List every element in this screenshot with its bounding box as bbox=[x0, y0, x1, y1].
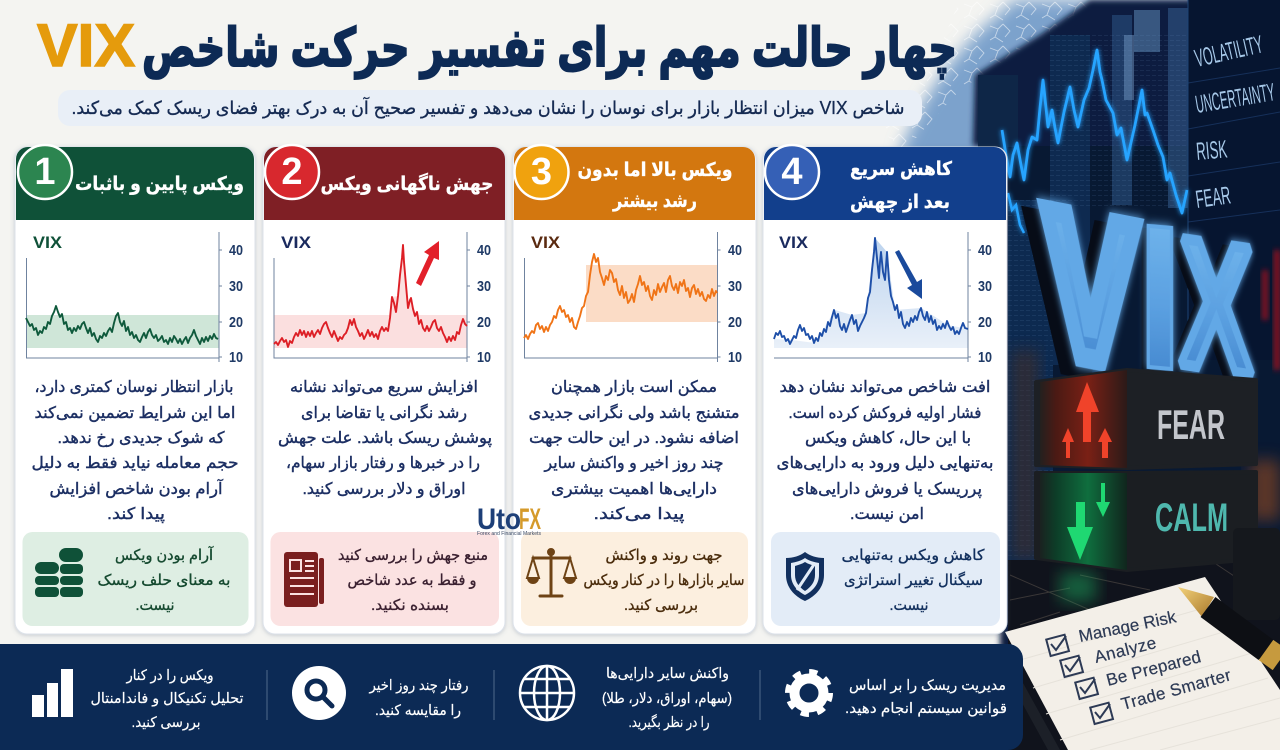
card 4 description: به‌تنهایی دلیل ورود به دارایی‌های bbox=[776, 455, 994, 473]
card 1 number badge bbox=[18, 145, 72, 199]
card 3 callout: بررسی کنید. bbox=[624, 597, 698, 614]
label: FEAR: FEAR bbox=[1157, 401, 1225, 448]
card 2 callout: و فقط به عدد شاخص bbox=[348, 572, 476, 589]
card 2 callout: بسنده نکنید. bbox=[371, 597, 449, 614]
card 2 callout: منبع جهش را بررسی کنید bbox=[338, 547, 488, 564]
checklist item: manage risk bbox=[1046, 607, 1178, 656]
card 2 chart: 10 bbox=[477, 349, 491, 366]
3D VIX letters: V bbox=[1030, 173, 1121, 419]
panel: card 4 fast decline bbox=[763, 145, 1007, 634]
card 3 heading: ویکس بالا اما بدون bbox=[578, 160, 732, 181]
card 4 heading: بعد از چهش bbox=[850, 192, 950, 213]
card 3 chart: VIX bbox=[531, 233, 561, 252]
card 2 description: افزایش سریع می‌تواند نشانه bbox=[290, 379, 478, 397]
market line chart glow bbox=[1002, 50, 1187, 233]
card 2 chart: 20 bbox=[477, 314, 491, 331]
icon: globe bbox=[520, 666, 574, 720]
card 2 number badge bbox=[265, 145, 319, 199]
card 3 description: پیدا می‌کند. bbox=[594, 506, 684, 524]
card 4 chart: 40 bbox=[978, 242, 992, 259]
label: CALM: CALM bbox=[1155, 496, 1228, 540]
card 1 chart: 30 bbox=[229, 278, 243, 295]
card 4 chart: 30 bbox=[978, 278, 992, 295]
card 2 chart: 30 bbox=[477, 278, 491, 295]
card 2 chart bbox=[274, 232, 491, 366]
card 3 description: دارایی‌ها اهمیت بیشتری bbox=[551, 481, 717, 499]
card 2 description: را در خبرها و رفتار بازار سهام، bbox=[286, 455, 480, 473]
card 3 chart: 10 bbox=[728, 349, 742, 366]
right-side keywords: FEAR bbox=[1194, 181, 1232, 214]
card 4 callout: کاهش ویکس به‌تنهایی bbox=[842, 547, 985, 564]
card 1 chart: 10 bbox=[229, 349, 243, 366]
card 4 description: امن نیست. bbox=[850, 506, 924, 524]
card 1 description: اما این شرایط تضمین نمی‌کند bbox=[34, 405, 236, 423]
card 2 number badge: 2 bbox=[281, 151, 303, 193]
icon: shield bbox=[786, 552, 824, 601]
card 3 chart: 40 bbox=[728, 242, 742, 259]
right-side keywords: RISK bbox=[1195, 135, 1229, 166]
icon: newspaper bbox=[284, 552, 324, 607]
cube: calm bbox=[1036, 472, 1256, 570]
card 4 description: با این حال، کاهش ویکس bbox=[805, 430, 971, 448]
card 2 description: اوراق و دلار بررسی کنید. bbox=[302, 481, 466, 499]
panel: card 1 low VIX bbox=[15, 145, 255, 634]
dark cube at right bbox=[1233, 528, 1280, 620]
card 2 description: رشد نگرانی یا تقاضا برای bbox=[301, 403, 467, 423]
card 4 chart bbox=[774, 232, 992, 366]
3D VIX letters: V bbox=[1045, 165, 1136, 411]
card 4 heading bbox=[850, 159, 953, 213]
checklist item: manage risk: Manage Risk bbox=[1077, 607, 1178, 646]
card 2 callout bbox=[270, 532, 499, 626]
checklist item: be prepared bbox=[1075, 647, 1203, 699]
card 4 chart: VIX bbox=[779, 233, 809, 252]
card 3 description bbox=[528, 379, 740, 524]
checklist item: be prepared: Be Prepared bbox=[1104, 647, 1203, 690]
card 1 callout: به معنای حلف ریسک bbox=[98, 572, 230, 589]
card 1 callout: آرام بودن ویکس bbox=[115, 546, 214, 564]
icon: bars bbox=[32, 669, 73, 717]
3D VIX letters: X bbox=[1171, 204, 1244, 419]
card 1 chart: 40 bbox=[229, 242, 243, 259]
card 3 heading bbox=[578, 160, 732, 212]
footer item: chart analysis bbox=[32, 668, 244, 731]
footer bar bbox=[0, 644, 1023, 750]
card 4 number badge bbox=[765, 145, 819, 199]
footer item: other assets bbox=[520, 666, 732, 731]
card 3 description: اضافه نشود. در این حالت جهت bbox=[529, 430, 739, 448]
card 1 description bbox=[32, 379, 238, 524]
icon: magnifier bbox=[292, 666, 346, 720]
card 1 heading: ویکس پایین و باثبات bbox=[75, 174, 244, 195]
checklist item: trade smarter: Trade Smarter bbox=[1119, 665, 1233, 714]
3D VIX letters: I bbox=[1134, 188, 1179, 420]
card 3 callout: جهت روند و واکنش bbox=[606, 547, 722, 564]
logo: UtoFX: Uto bbox=[477, 503, 521, 536]
card 2 heading: جهش ناگهانی ویکس bbox=[320, 172, 494, 195]
3D VIX letters: X bbox=[1180, 200, 1253, 415]
footer item: chart analysis: بررسی کنید. bbox=[132, 715, 200, 731]
arrow: down bbox=[895, 250, 922, 299]
card 3 number badge: 3 bbox=[531, 151, 552, 193]
card 3 description: متشنج باشد ولی نگرانی جدیدی bbox=[528, 403, 740, 423]
card 1 description: بازار انتظار نوسان کمتری دارد، bbox=[34, 379, 234, 397]
card 1 number badge: 1 bbox=[34, 151, 56, 193]
card 3 header bbox=[514, 147, 755, 220]
card 2 description bbox=[278, 379, 492, 499]
card 1 description: که شوک جدیدی رخ ندهد. bbox=[58, 430, 225, 448]
card 1 description: پیدا کند. bbox=[107, 506, 165, 524]
3D VIX letters: I bbox=[1137, 182, 1182, 414]
footer item: chart analysis: تحلیل تکنیکال و فاندامنتال bbox=[90, 691, 244, 707]
card 3 description: چند روز اخیر و واکنش سایر bbox=[544, 455, 724, 473]
panel: card 3 high VIX no growth bbox=[513, 145, 756, 634]
footer item: risk rules bbox=[788, 672, 1007, 717]
card 4 description: افت شاخص می‌تواند نشان دهد bbox=[780, 379, 990, 397]
icon: scales bbox=[527, 550, 576, 596]
card 3 chart: 30 bbox=[728, 278, 742, 295]
card 3 callout bbox=[521, 532, 748, 626]
3D VIX letters bbox=[1030, 165, 1253, 420]
icon: green down arrows bbox=[1067, 483, 1110, 560]
card 2 chart: VIX bbox=[281, 233, 312, 252]
card 4 callout: نیست. bbox=[890, 597, 928, 614]
card 1 description: آرام بودن شاخص افزایش bbox=[50, 479, 224, 499]
title: VIX bbox=[37, 12, 135, 79]
cube: fear bbox=[1036, 370, 1256, 468]
footer item: chart analysis: ویکس را در کنار bbox=[126, 668, 214, 684]
card 4 number badge: 4 bbox=[781, 151, 803, 193]
footer item: recent days: را مقایسه کنید. bbox=[375, 703, 461, 719]
footer item: other assets: (سهام، اوراق، دلار، طلا) bbox=[602, 691, 732, 707]
card 1 description: حجم معامله نیاید فقط به دلیل bbox=[32, 455, 238, 472]
logo: UtoFX: FX bbox=[519, 503, 541, 536]
card 2 description: پوشش ریسک باشد. علت جهش bbox=[278, 430, 492, 448]
card 4 chart: 20 bbox=[978, 314, 992, 331]
footer item: risk rules: مدیریت ریسک را بر اساس bbox=[849, 678, 1006, 694]
card 1 chart: VIX bbox=[33, 233, 63, 252]
icon: coins bbox=[35, 548, 83, 597]
card 1 chart: 20 bbox=[229, 314, 243, 331]
logo: UtoFX: Forex and Financial Markets bbox=[477, 531, 541, 537]
card 4 callout: سیگنال تغییر استراتژی bbox=[844, 571, 983, 589]
card 1 chart bbox=[26, 232, 243, 366]
icon: red up arrows bbox=[1062, 382, 1112, 458]
footer item: recent days bbox=[292, 666, 468, 720]
icon: gear bbox=[788, 672, 830, 714]
card 3 heading: رشد بیشتر bbox=[612, 191, 697, 212]
subtitle pill bbox=[58, 90, 922, 126]
card 1 header bbox=[16, 147, 254, 220]
right-side keywords bbox=[1192, 30, 1277, 214]
background: market image panel bbox=[880, 0, 1280, 750]
arrow: up bbox=[416, 241, 439, 286]
panel: card 2 sudden jump bbox=[263, 145, 505, 634]
title bbox=[37, 12, 957, 79]
card 1 callout: نیست. bbox=[136, 597, 174, 614]
card 4 description: فشار اولیه فروکش کرده است. bbox=[788, 405, 982, 423]
card 3 chart bbox=[524, 232, 742, 366]
footer item: other assets: را در نظر بگیرید. bbox=[628, 714, 710, 731]
card 3 description: ممکن است بازار همچنان bbox=[551, 379, 717, 397]
card 4 description bbox=[776, 379, 994, 524]
card 4 header bbox=[764, 147, 1006, 220]
subtitle pill: شاخص VIX میزان انتظار بازار برای نوسان را نشان می‌دهد و تفسیر صحیح آن به درک بهتر فضای ریسک کمک می‌کند. bbox=[72, 96, 904, 119]
notepad checklist bbox=[1005, 577, 1280, 750]
card 3 chart: 20 bbox=[728, 314, 742, 331]
card 1 callout bbox=[22, 532, 248, 626]
footer item: recent days: رفتار چند روز اخیر bbox=[369, 678, 468, 694]
card 3 callout: سایر بازارها را در کنار ویکس bbox=[584, 572, 744, 589]
checklist item: analyze bbox=[1060, 633, 1158, 677]
pen bbox=[1178, 587, 1280, 660]
footer item: risk rules: قوانین سیستم انجام دهید. bbox=[845, 701, 1007, 717]
card 2 header bbox=[264, 147, 505, 220]
card 4 description: پرریسک یا فروش دارایی‌های bbox=[792, 481, 982, 499]
title: چهار حالت مهم برای تفسیر حرکت شاخص bbox=[142, 19, 957, 79]
card 4 chart: 10 bbox=[978, 349, 992, 366]
card 3 number badge bbox=[514, 145, 568, 199]
checklist item: trade smarter bbox=[1090, 665, 1233, 724]
footer item: other assets: واکنش سایر دارایی‌ها bbox=[606, 666, 729, 682]
card 2 chart: 40 bbox=[477, 242, 491, 259]
checklist item: analyze: Analyze bbox=[1092, 633, 1158, 667]
card 4 heading: کاهش سریع bbox=[850, 159, 953, 180]
card 4 callout bbox=[771, 532, 1000, 626]
